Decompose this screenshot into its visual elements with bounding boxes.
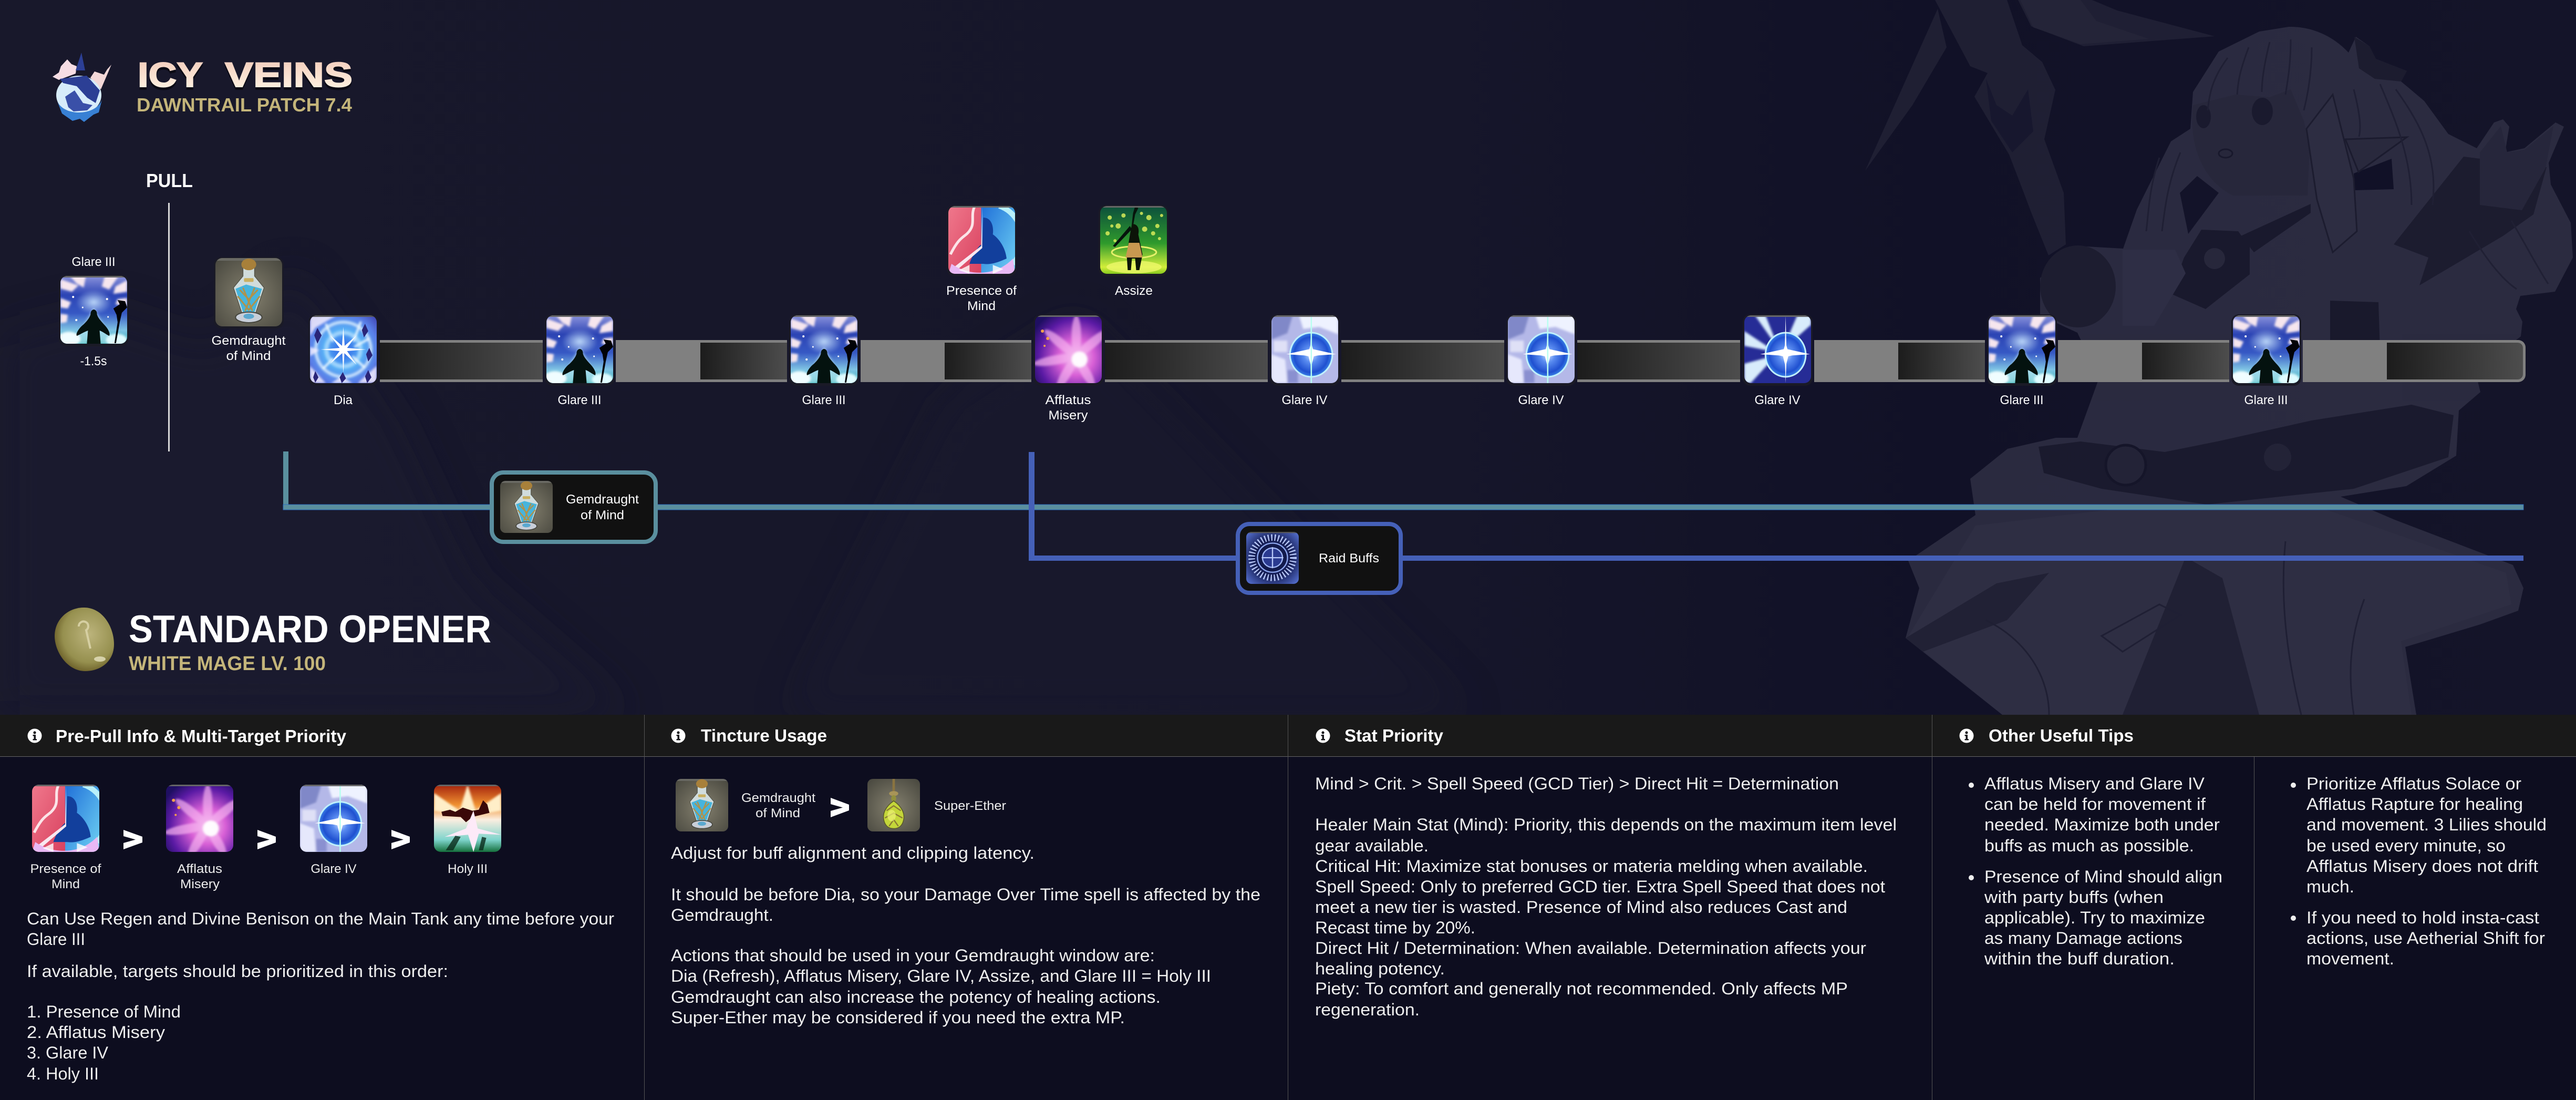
panel: pre-pull info and multi-target priority: If available, targets should be prioritized in this order: [27,962,448,981]
GCD 8: Glare III: Glare III [2000,393,2044,407]
pull marker: PULL [146,170,193,191]
pre-pull action: Glare III: -1.5s [80,354,107,368]
panel: pre-pull info and multi-target priority: 4. Holy III [27,1064,99,1083]
oGCD action: Presence of Mind: Presence of [946,284,1017,298]
subtitle: WHITE MAGE LV. 100 [129,653,326,675]
panel: stat priority: meet a new tier is wasted. Presence of Mind also reduces Cast and [1315,898,1847,917]
oGCD action: Presence of Mind [946,205,1022,313]
panel: other useful tips: movement. [2306,949,2394,968]
GCD 9: Glare III: Glare III [2244,393,2288,407]
panel: other useful tips: If you need to hold insta-cast [2306,908,2539,927]
panel: stat priority: Direct Hit / Determination: When available. Determination affects your [1315,939,1866,958]
buff track: Gemdraught window: Gemdraught [566,492,639,507]
pre-pull action: Glare III [57,255,129,368]
patch subtitle: DAWNTRAIL PATCH 7.4 [137,94,352,116]
GCD 4: Afflatus Misery: Afflatus [1046,393,1091,407]
panel: pre-pull info and multi-target priority [27,726,614,1083]
oGCD action: Presence of Mind: Mind [967,299,996,313]
logo wordmark: ICY [138,55,203,94]
panel: stat priority: healing potency. [1315,959,1445,978]
panel: other useful tips: applicable). Try to maximize [1984,908,2205,927]
buff track: raid buffs window [1029,452,2523,593]
panel: tincture usage: Adjust for buff alignment and clipping latency. [671,844,1034,862]
GCD 2: Glare III: Glare III [558,393,601,407]
GCD 4: Afflatus Misery: Misery [1049,408,1088,423]
logo wordmark: VEINS [225,55,353,94]
icon: soul crystal [55,608,114,671]
GCD 5: Glare IV: Glare IV [1282,393,1327,407]
panel: pre-pull info and multi-target priority: Afflatus [177,862,222,876]
GCD 3: Glare III: Glare III [802,393,846,407]
panel: other useful tips: Afflatus Misery and Glare IV [1984,774,2205,793]
panel: pre-pull info and multi-target priority: Glare IV [311,862,356,876]
panel: stat priority: regeneration. [1315,1000,1420,1019]
panel: tincture usage: It should be before Dia, so your Damage Over Time spell is affected by the [671,885,1260,904]
GCD 1: Dia: Dia [334,393,353,407]
GCD 3: Glare III [788,314,859,407]
panel: tincture usage: Gemdraught [741,791,815,805]
oGCD action: Assize [1099,205,1168,298]
tincture action: Gemdraught of Mind: Gemdraught [211,334,286,348]
pull marker [146,170,193,451]
panel: tincture usage: Super-Ether may be considered if you need the extra MP. [671,1008,1125,1027]
logo wordmark: ICY [138,58,203,97]
panel: pre-pull info and multi-target priority: Holy III [448,862,488,876]
buff track: Gemdraught window: of Mind [581,508,624,522]
GCD 2: Glare III [543,314,615,407]
panel: pre-pull info and multi-target priority: 2. Afflatus Misery [27,1023,165,1042]
panel: other useful tips: Prioritize Afflatus Solace or [2306,774,2521,793]
GCD 7: Glare IV [1743,314,1813,407]
panel: tincture usage: Actions that should be used in your Gemdraught window are: [671,946,1155,965]
panel: other useful tips: Afflatus Rapture for healing [2306,795,2523,814]
panel: other useful tips: Other Useful Tips [1989,726,2134,745]
panel: tincture usage: Super-Ether [934,799,1006,813]
panel: stat priority: Stat Priority [1344,726,1444,745]
panel: pre-pull info and multi-target priority: Misery [180,877,220,891]
panel: other useful tips: actions, use Aetherial Shift for [2306,929,2545,948]
logo wordmark [138,55,353,97]
panel: other useful tips: as many Damage actions [1984,929,2182,948]
panel: stat priority: Healer Main Stat (Mind): Priority, this depends on the maximum item level [1315,815,1897,834]
logo icon [53,53,111,122]
GCD 5: Glare IV [1270,314,1340,407]
panel: tincture usage [671,726,1260,1027]
GCD 9: Glare III [2230,314,2301,407]
buff track: raid buffs window: Raid Buffs [1319,551,1379,566]
panel: other useful tips: be used every minute, so [2306,836,2506,855]
panel: stat priority: Recast time by 20%. [1315,918,1475,937]
panel: other useful tips: with party buffs (when [1984,888,2164,907]
background character art: white mage lalafell [1865,0,2573,715]
panel: other useful tips [1960,726,2547,968]
logo wordmark: VEINS [225,58,353,97]
panel: stat priority: Mind > Crit. > Spell Speed (GCD Tier) > Direct Hit = Determination [1315,774,1839,793]
panel: other useful tips: can be held for movement if [1984,795,2206,814]
panel: pre-pull info and multi-target priority: Mind [51,877,80,891]
GCD 7: Glare IV: Glare IV [1755,393,1800,407]
panel: other useful tips: needed. Maximize both under [1984,815,2220,834]
GCD 6: Glare IV [1506,314,1576,407]
tincture action: Gemdraught of Mind: of Mind [226,349,271,363]
info section frame [0,715,2576,1100]
panel: stat priority: Piety: To comfort and generally not recommended. Only affects MP [1315,979,1848,998]
panel: other useful tips: and movement. 3 Lilies should [2306,815,2547,834]
panel: tincture usage: Dia (Refresh), Afflatus Misery, Glare IV, Assize, and Glare III = Holy III [671,967,1211,985]
GCD 6: Glare IV: Glare IV [1518,393,1564,407]
background [0,0,2576,715]
title: STANDARD OPENER [129,608,491,651]
GCD timeline bar [380,340,2526,382]
panel: other useful tips: Presence of Mind should align [1984,867,2222,886]
panel: pre-pull info and multi-target priority: 1. Presence of Mind [27,1002,181,1021]
panel: other useful tips: Afflatus Misery does not drift [2306,857,2538,876]
panel: tincture usage: of Mind [756,806,800,820]
panel: stat priority: Spell Speed: Only to preferred GCD tier. Extra Spell Speed that does not [1315,877,1885,896]
panel: pre-pull info and multi-target priority: Presence of [30,862,101,876]
panel: stat priority: Critical Hit: Maximize stat bonuses or materia melding when available. [1315,857,1868,876]
GCD 1: Dia [308,314,378,407]
panel: stat priority [1315,726,1897,1019]
tincture action: Gemdraught of Mind [211,257,286,363]
pre-pull action: Glare III: Glare III [71,255,116,269]
GCD 4: Afflatus Misery [1033,314,1111,423]
panel: tincture usage: Gemdraught. [671,906,773,924]
GCD 8: Glare III [1985,314,2057,407]
oGCD action: Assize: Assize [1115,284,1153,298]
panel: pre-pull info and multi-target priority: Glare III [27,930,85,949]
panel: stat priority: gear available. [1315,836,1429,855]
panel: tincture usage: Tincture Usage [701,726,827,745]
panel: other useful tips: buffs as much as possible. [1984,836,2194,855]
panel: pre-pull info and multi-target priority: Pre-Pull Info & Multi-Target Priority [56,726,347,746]
panel: other useful tips: much. [2306,877,2354,896]
buff track: Gemdraught window [283,451,2523,542]
panel: tincture usage: Gemdraught can also increase the potency of healing actions. [671,988,1161,1006]
panel: other useful tips: within the buff duration. [1984,949,2175,968]
panel: pre-pull info and multi-target priority: Can Use Regen and Divine Benison on the Main Tank any time before your [27,909,614,928]
panel: pre-pull info and multi-target priority: 3. Glare IV [27,1043,109,1062]
